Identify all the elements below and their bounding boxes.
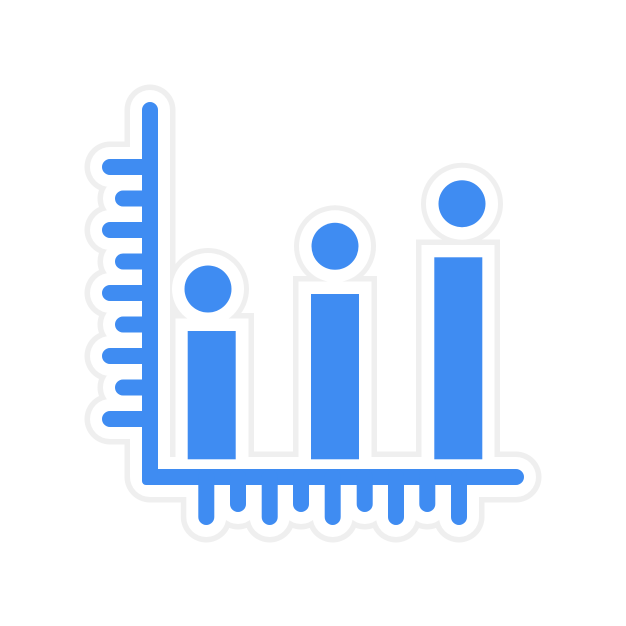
sticker outline: grey outer contour — [110, 110, 516, 517]
y-axis tick marks — [110, 167, 150, 419]
bar 1 with dot — [184, 266, 236, 459]
sticker outline: white inner fill — [110, 110, 516, 517]
chart axes — [142, 110, 516, 485]
bar 3 with dot — [434, 180, 486, 459]
bar 2 with dot — [311, 223, 359, 459]
x-axis tick marks — [206, 477, 459, 517]
